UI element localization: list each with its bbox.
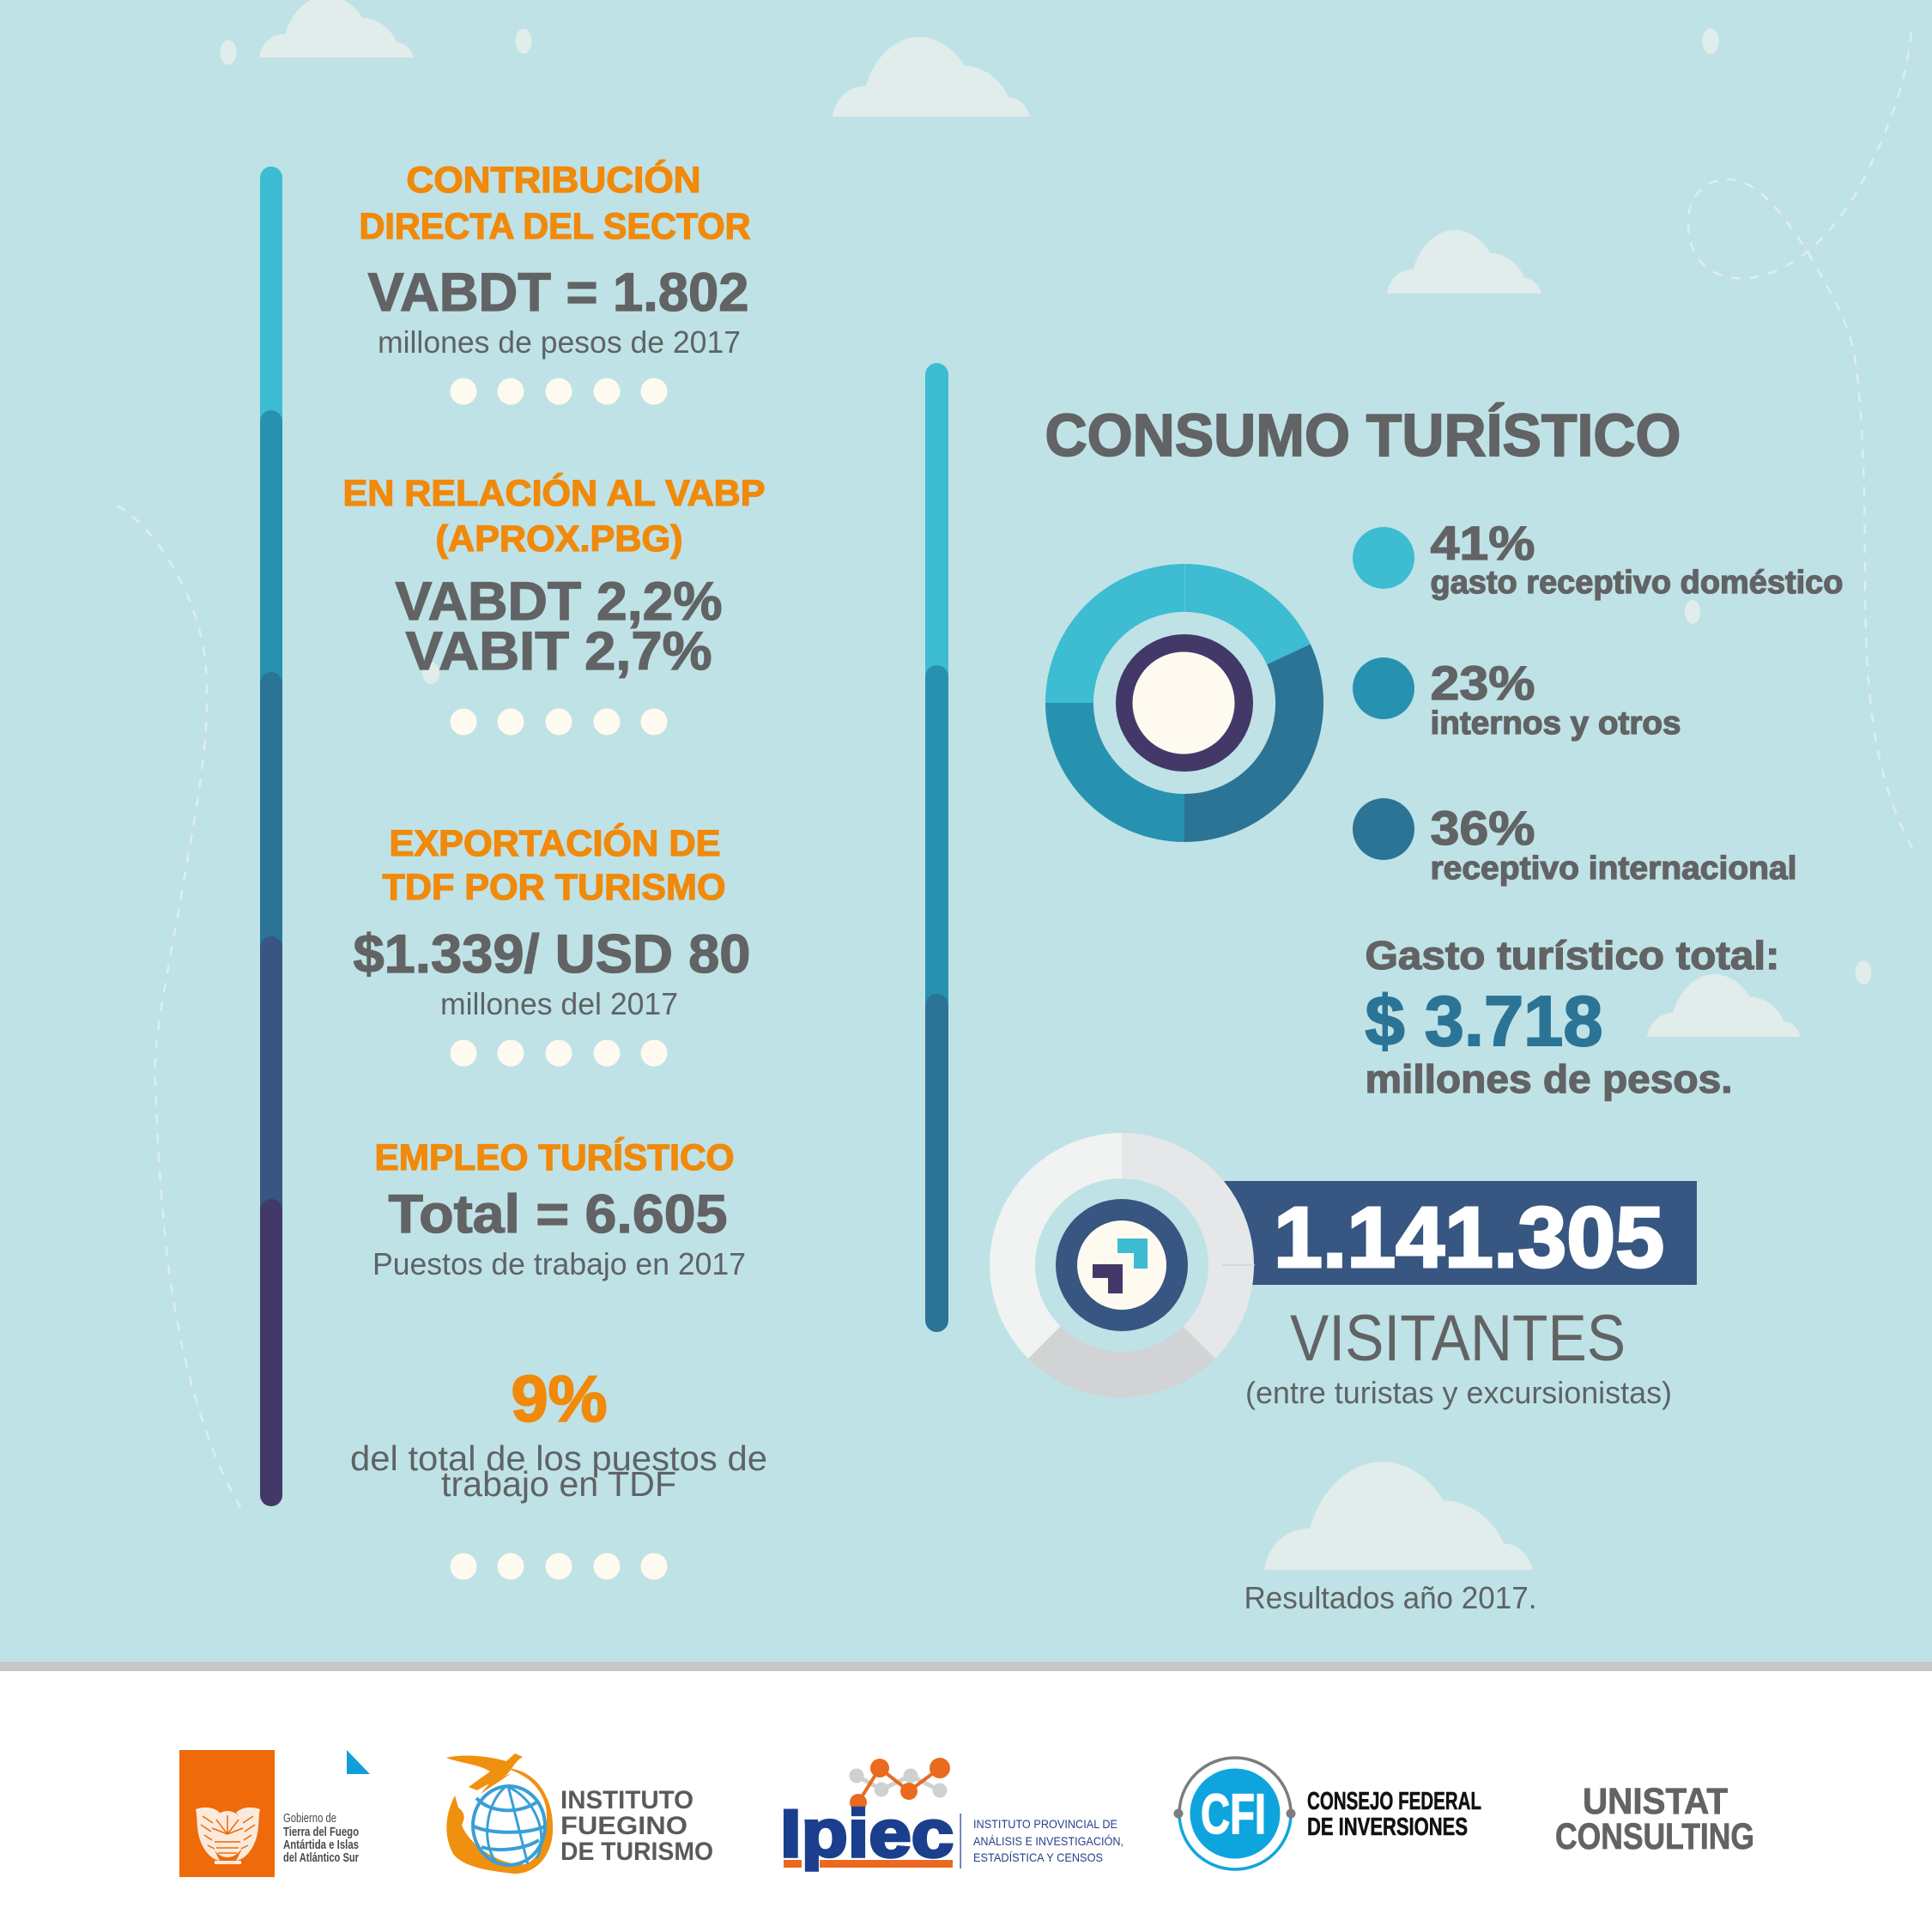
panel: en relación al VABP [343,472,766,735]
panel: contribución directa [359,159,750,405]
legend: 23 percent [1353,656,1681,742]
legend: 41 percent [1353,516,1844,601]
legend: 41 percent: 41% [1430,516,1535,570]
logo text: INSTITUTO PROVINCIAL DE [973,1817,1117,1831]
logo text: Tierra del Fuego [283,1826,359,1839]
icon: molecule chain [850,1758,950,1811]
logo text: Antártida e Islas [283,1838,359,1852]
logo: CFI: DE INVERSIONES [1307,1814,1468,1841]
logo: CFI: CFI [1201,1782,1266,1845]
icon: orange egg with bird [446,1753,553,1874]
heading: en relación al VABP [343,472,766,560]
logo text: FUEGINO [560,1812,687,1840]
note: millones de pesos: millones de pesos de 2017 [378,324,741,360]
callout: gasto turístico total: Gasto turístico total: [1365,933,1780,978]
heading: contribución directa del sector: CONTRIBUCIÓN [407,159,700,201]
note: resultados año 2017: Resultados año 2017. [1245,1580,1536,1615]
legend: 23 percent: 23% [1430,656,1535,710]
visitantes banner [1224,1181,1697,1285]
value: visitantes total: 1.141.305 [1274,1190,1664,1286]
logo: CFI [1174,1758,1481,1869]
heading: exportación de TDF por turismo: TDF POR TURISMO [383,867,726,908]
donut chart: consumo [1045,564,1323,842]
logo: CFI: CONSEJO FEDERAL [1307,1788,1481,1815]
dots row [450,378,668,405]
logo: unistat consulting [1555,1781,1754,1857]
logo text: DE TURISMO [560,1838,713,1866]
note: del total de los puestos: del total de los puestos de [350,1438,767,1478]
note: puestos de trabajo: Puestos de trabajo en 2017 [372,1246,746,1281]
note: del total de los puestos [350,1438,767,1504]
note: millones del 2017: millones del 2017 [440,986,678,1021]
dots row [450,1040,668,1066]
background decoration: clouds and drops [220,0,1871,1570]
footer divider band [0,1662,1932,1671]
dots row [450,709,668,735]
logo text: ESTADÍSTICA Y CENSOS [973,1850,1103,1864]
values: VABDT and VABIT [395,572,723,681]
note: entre turistas y excursionistas: (entre turistas y excursionistas) [1245,1375,1672,1410]
heading: contribución directa del sector [359,159,750,247]
logo text: INSTITUTO [560,1786,693,1814]
legend: 41 percent: gasto receptivo doméstico [1430,565,1844,601]
value: 1.339 / USD 80: $1.339/ USD 80 [354,924,750,984]
panel: empleo turístico [350,1137,767,1579]
left timeline bar [260,167,282,1506]
legend: 36 percent [1353,798,1797,887]
logo: ipiec [780,1758,1123,1871]
icon: provincial emblem [196,1808,260,1864]
label: visitantes: VISITANTES [1290,1302,1626,1375]
panel: exportación [354,822,750,1066]
logo wordmark: Ipiec [780,1796,954,1871]
logo: gobierno de tierra del fuego [179,1750,370,1877]
title: consumo turístico: CONSUMO TURÍSTICO [1045,402,1681,469]
background decoration: dashed flight paths [117,33,1912,1510]
callout: gasto turístico total [1365,933,1780,1101]
values: VABDT and VABIT: VABDT 2,2% [395,572,723,632]
logo: unistat consulting: CONSULTING [1555,1816,1754,1857]
callout: gasto turístico total: millones de pesos. [1365,1057,1732,1101]
emblem inner detail [201,1815,255,1853]
icon: globe [473,1786,545,1865]
note: del total de los puestos: trabajo en TDF [441,1464,676,1504]
logo: unistat consulting: UNISTAT [1583,1781,1728,1822]
value: VABDT 1.802: VABDT = 1.802 [367,263,748,323]
dots row [450,1553,668,1579]
logo text [560,1786,713,1866]
heading: en relación al VABP: (APROX.PBG) [436,518,683,560]
heading: exportación de TDF por turismo [383,822,726,908]
footer background [0,1671,1932,1932]
values: VABDT and VABIT: VABIT 2,7% [405,621,712,681]
logo: instituto fueguino de turismo [446,1753,713,1874]
heading: contribución directa del sector: DIRECTA DEL SECTOR [359,206,750,247]
logo text [283,1812,359,1865]
callout: gasto turístico total: $ 3.718 [1365,981,1603,1061]
center timeline bar [925,363,948,1332]
legend: 36 percent: receptivo internacional [1430,851,1797,887]
heading: exportación de TDF por turismo: EXPORTACIÓN DE [390,822,721,864]
heading: en relación al VABP: EN RELACIÓN AL VABP [343,472,766,514]
value: 9 percent: 9% [512,1363,608,1436]
legend: 36 percent: 36% [1430,801,1535,855]
heading: empleo turístico: EMPLEO TURÍSTICO [374,1137,735,1178]
logo underline [784,1860,953,1868]
legend: 23 percent: internos y otros [1430,706,1681,742]
donut chart: visitantes [990,1133,1255,1397]
logo text [973,1817,1123,1864]
logo text: del Atlántico Sur [283,1851,359,1865]
value: total 6.605: Total = 6.605 [388,1184,728,1245]
logo text: Gobierno de [283,1812,336,1826]
logo text: ANÁLISIS E INVESTIGACIÓN, [973,1834,1123,1848]
